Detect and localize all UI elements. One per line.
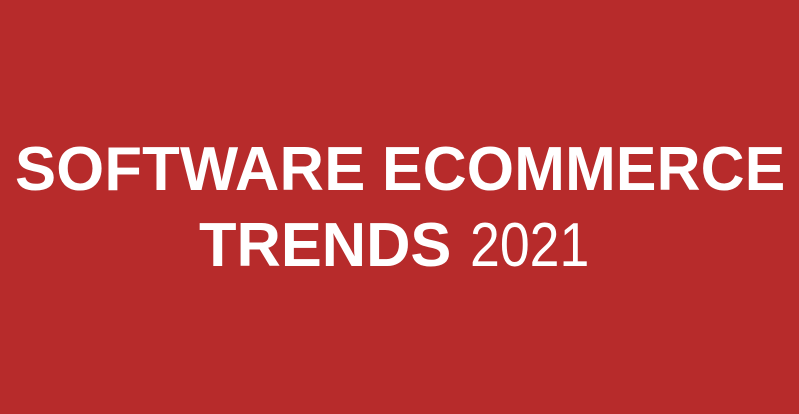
heading word: trends: TRENDS [199, 211, 451, 280]
heading word: software: SOFTWARE [15, 135, 365, 204]
heading word: ecommerce: ECOMMERCE [382, 135, 785, 204]
heading year: 2021: 2021 [470, 211, 589, 280]
